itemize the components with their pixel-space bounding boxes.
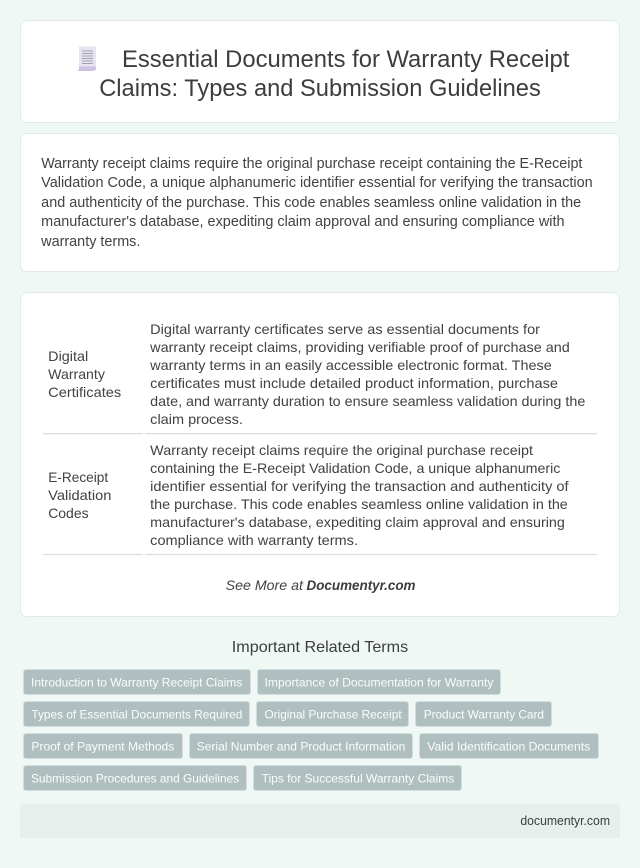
row: E-Receipt Validation Codes — [48, 442, 569, 548]
panel: introduction — [20, 134, 620, 272]
intro paragraph: Validation Code, a unique alphanumeric identifier essential for verifying the transaction — [41, 175, 593, 191]
chip — [24, 734, 182, 758]
chip: Product Warranty Card — [424, 708, 544, 722]
chip: Tips for Successful Warranty Claims — [262, 772, 454, 786]
title text: Essential Documents for Warranty Receipt — [122, 46, 570, 73]
row: E-Receipt Validation Codes: manufacturer's database, expediting claim approval and ensuring — [150, 514, 565, 530]
chip — [24, 702, 250, 726]
see more link — [226, 577, 416, 593]
row: Digital Warranty Certificates: date, and warranty duration to ensure seamless validation during the — [150, 393, 586, 409]
row: E-Receipt Validation Codes: E-Receipt — [48, 469, 108, 485]
see more link: Documentyr.com — [306, 577, 416, 593]
chip — [190, 734, 412, 758]
intro paragraph: and authenticity of the purchase. This code enables seamless online validation in the — [41, 195, 581, 211]
chip — [258, 670, 500, 694]
row: Digital Warranty Certificates — [48, 321, 586, 427]
chip — [416, 702, 552, 726]
chip — [254, 766, 462, 790]
row: E-Receipt Validation Codes: Codes — [48, 505, 89, 521]
row: Digital Warranty Certificates: Digital warranty certificates serve as essential documents for — [150, 321, 540, 337]
heading: related terms: Important Related Terms — [232, 639, 408, 656]
intro paragraph: warranty terms. — [40, 234, 140, 250]
chip: Serial Number and Product Information — [197, 740, 405, 754]
intro paragraph — [40, 156, 593, 250]
chip: Submission Procedures and Guidelines — [31, 772, 239, 786]
chip: Introduction to Warranty Receipt Claims — [31, 676, 242, 690]
row: E-Receipt Validation Codes: containing the E-Receipt Validation Code, a unique alphanumeric — [150, 460, 560, 476]
row: Digital Warranty Certificates: Certificates — [48, 384, 121, 400]
row: Digital Warranty Certificates: claim process. — [150, 411, 243, 427]
chip: Original Purchase Receipt — [264, 708, 402, 722]
chip: Importance of Documentation for Warranty — [264, 676, 494, 690]
chip: Types of Essential Documents Required — [31, 708, 242, 722]
chip: Proof of Payment Methods — [31, 740, 174, 754]
intro paragraph: manufacturer's database, expediting claim approval and ensuring compliance with — [41, 214, 564, 230]
related term chips — [24, 670, 598, 790]
row: Digital Warranty Certificates: warranty terms in an easily accessible electronic format. These — [149, 357, 552, 373]
row: E-Receipt Validation Codes: Warranty receipt claims require the original purchase receipt — [150, 442, 533, 458]
footer bar: documentyr.com — [520, 813, 610, 828]
footer bar — [20, 804, 620, 838]
see more link: See More at — [226, 577, 304, 593]
panel: title: Claims: Types and Submission Guidelines — [99, 75, 541, 102]
icon: receipt — [76, 46, 96, 71]
panel: title — [20, 20, 620, 122]
chip — [24, 766, 246, 790]
row: Digital Warranty Certificates: warranty receipt claims, providing verifiable proof of purchase and — [149, 339, 570, 355]
chip — [24, 670, 250, 694]
row: Digital Warranty Certificates: Digital — [48, 348, 88, 364]
chip — [256, 702, 408, 726]
chip: Valid Identification Documents — [427, 740, 590, 754]
panel: document table — [20, 292, 620, 616]
row: E-Receipt Validation Codes: the purchase. This code enables seamless online validation in the — [150, 496, 568, 512]
intro paragraph: Warranty receipt claims require the original purchase receipt containing the E-Receipt — [41, 156, 582, 172]
chip — [420, 734, 598, 758]
row: E-Receipt Validation Codes: identifier essential for verifying the transaction and authenticity of — [150, 478, 569, 494]
row: E-Receipt Validation Codes: Validation — [48, 487, 111, 503]
row: Digital Warranty Certificates: certificates must include detailed product information, purchase — [150, 375, 558, 391]
row: Digital Warranty Certificates: Warranty — [48, 366, 105, 382]
row: E-Receipt Validation Codes: compliance with warranty terms. — [150, 532, 358, 548]
